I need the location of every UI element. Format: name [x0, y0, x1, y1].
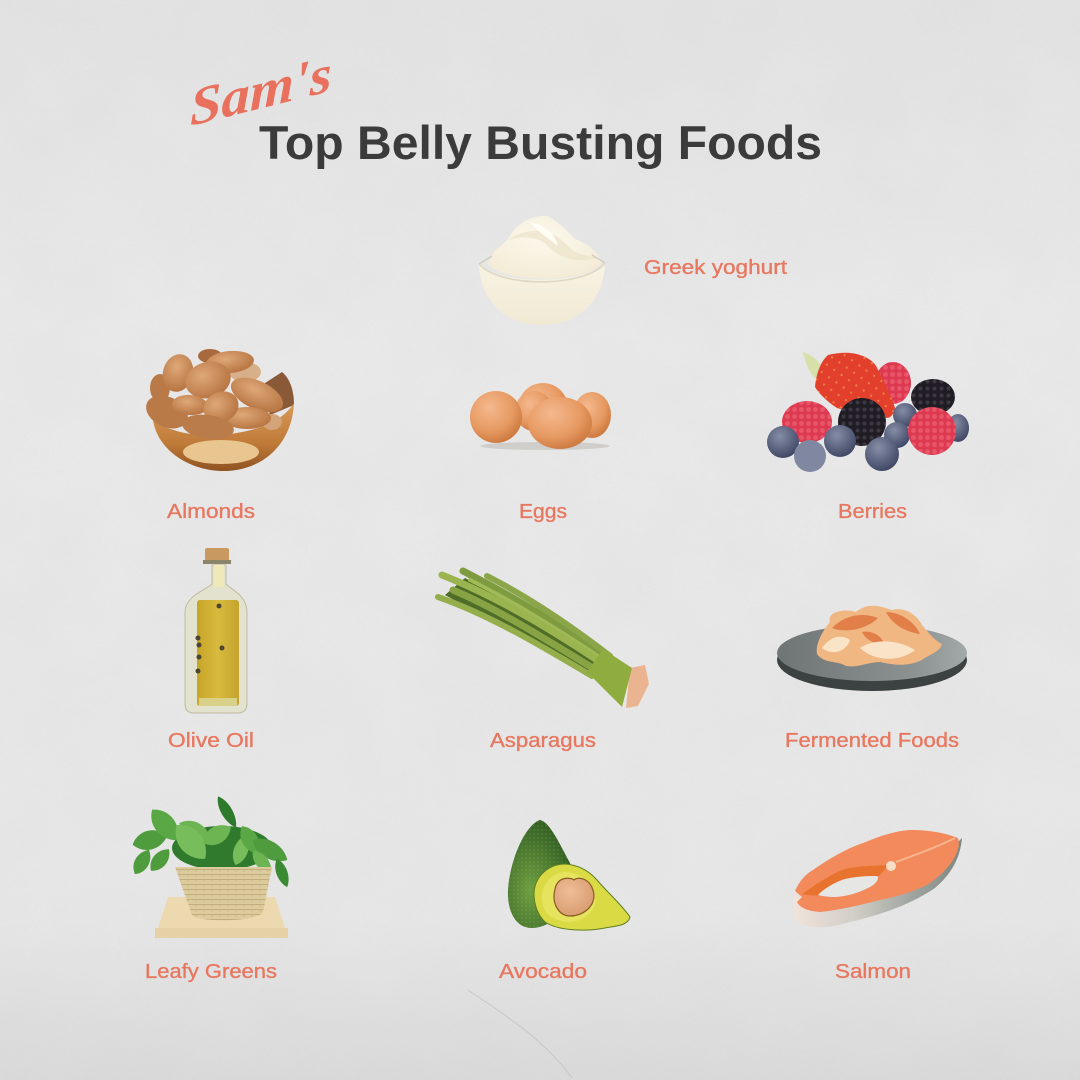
title script: Sam's: Sam's: [190, 44, 332, 138]
label: Berries: [838, 501, 907, 523]
label: Fermented Foods: [785, 730, 959, 752]
icon: avocado halves: [508, 820, 630, 930]
food item: Berries: [767, 352, 969, 523]
food item: Avocado: [499, 820, 630, 983]
label: Asparagus: [490, 730, 596, 752]
food item: Eggs: [470, 383, 611, 523]
icon: kimchi on plate: [777, 606, 967, 691]
food item: Fermented Foods: [777, 606, 967, 752]
title: Top Belly Busting Foods: Top Belly Busting Foods: [259, 116, 822, 169]
food item: Greek yoghurt: [479, 216, 787, 325]
icon: almonds in wooden bowl: [141, 349, 294, 471]
label: Eggs: [519, 501, 567, 523]
icon: olive oil bottle: [185, 548, 247, 713]
icon: mixed berries: [767, 352, 969, 472]
icon: asparagus bundle: [438, 571, 649, 708]
label: Leafy Greens: [145, 961, 277, 983]
label: Salmon: [835, 961, 911, 983]
icon: salmon steak: [794, 830, 962, 927]
food item: Olive Oil: [168, 548, 254, 752]
label: Avocado: [499, 961, 587, 983]
food item: Salmon: [794, 830, 962, 983]
food item: Leafy Greens: [129, 794, 292, 983]
food item: Almonds: [141, 349, 294, 523]
icon: yoghurt bowl: [479, 216, 605, 325]
label: Greek yoghurt: [644, 257, 787, 279]
icon: eggs: [470, 383, 611, 450]
label: Almonds: [167, 501, 255, 523]
label: Olive Oil: [168, 730, 254, 752]
food item: Asparagus: [438, 571, 649, 752]
icon: greens in basket on board: [129, 794, 292, 938]
